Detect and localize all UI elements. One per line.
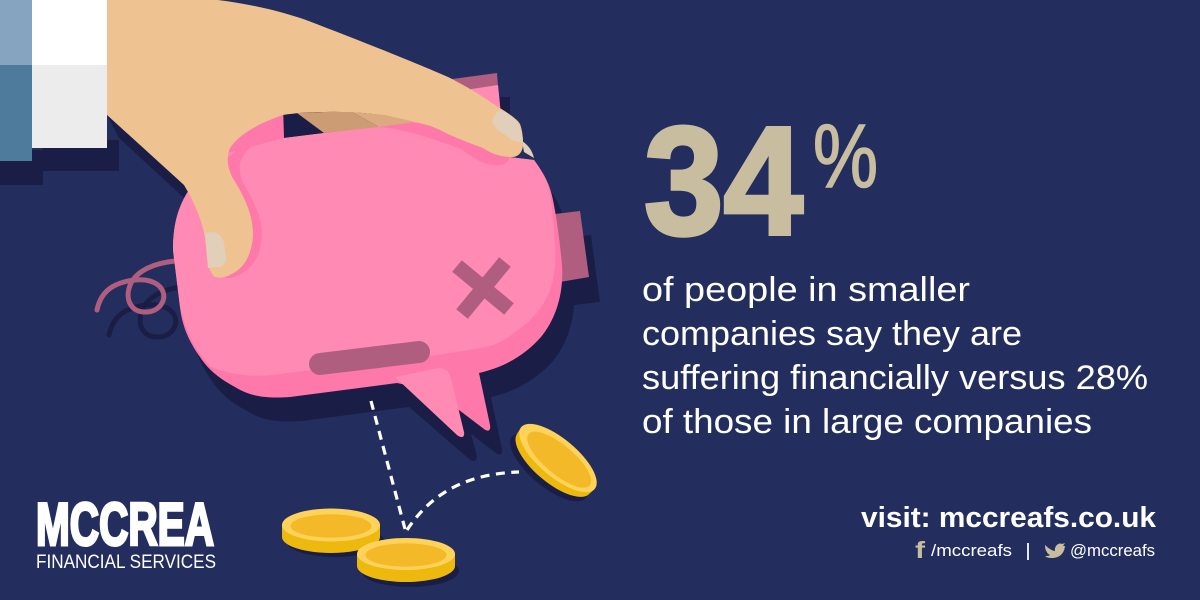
logo: MCCREA xyxy=(36,491,214,558)
icon: falling coin xyxy=(500,412,607,513)
icon: dark pink finger shadow xyxy=(222,112,510,278)
social links xyxy=(915,537,1155,563)
statistic description: companies say they are xyxy=(642,315,1022,353)
icon: shirt cuff xyxy=(0,0,107,161)
icon: fingernail xyxy=(493,110,523,142)
icon: coin on the ground right xyxy=(357,538,459,587)
big statistic: 34 xyxy=(644,95,803,267)
facebook handle: /mccreafs xyxy=(931,541,1012,560)
arrow: dashed coin bounce xyxy=(407,472,519,530)
arrow: dashed coin path down xyxy=(371,401,405,529)
icon: thumbnail xyxy=(205,232,226,268)
icon: shadow on finger xyxy=(352,112,415,127)
icon: piggy ear top xyxy=(445,73,501,140)
icon: coin slot mouth xyxy=(320,352,419,364)
icon: piggy bank body xyxy=(173,105,562,437)
icon: dead cross eye xyxy=(457,262,509,314)
big statistic: % xyxy=(813,107,878,207)
logo: FINANCIAL SERVICES xyxy=(36,552,216,573)
icon: hand xyxy=(107,0,534,278)
icon: coin on the ground left xyxy=(282,508,384,557)
icon: front tail xyxy=(395,368,464,437)
icon: twitter bird xyxy=(1045,543,1065,558)
icon: curly tail xyxy=(97,261,175,312)
logo xyxy=(36,491,216,573)
icon: piggy ear right xyxy=(555,211,589,282)
icon: facebook: f xyxy=(915,537,925,563)
icon: curly tail shadow xyxy=(109,286,187,337)
statistic description: of people in smaller xyxy=(642,271,970,309)
website: visit: mccreafs.co.uk xyxy=(861,502,1157,534)
statistic description xyxy=(642,271,1148,441)
statistic description: of those in large companies xyxy=(642,403,1092,441)
illustration: piggy bank shadow xyxy=(185,97,600,461)
twitter handle: @mccreafs xyxy=(1070,541,1155,560)
statistic description: suffering financially versus 28% xyxy=(642,359,1148,397)
icon: cuff shadow xyxy=(0,115,200,215)
icon: slot opening xyxy=(283,108,400,138)
separator xyxy=(1027,543,1029,560)
